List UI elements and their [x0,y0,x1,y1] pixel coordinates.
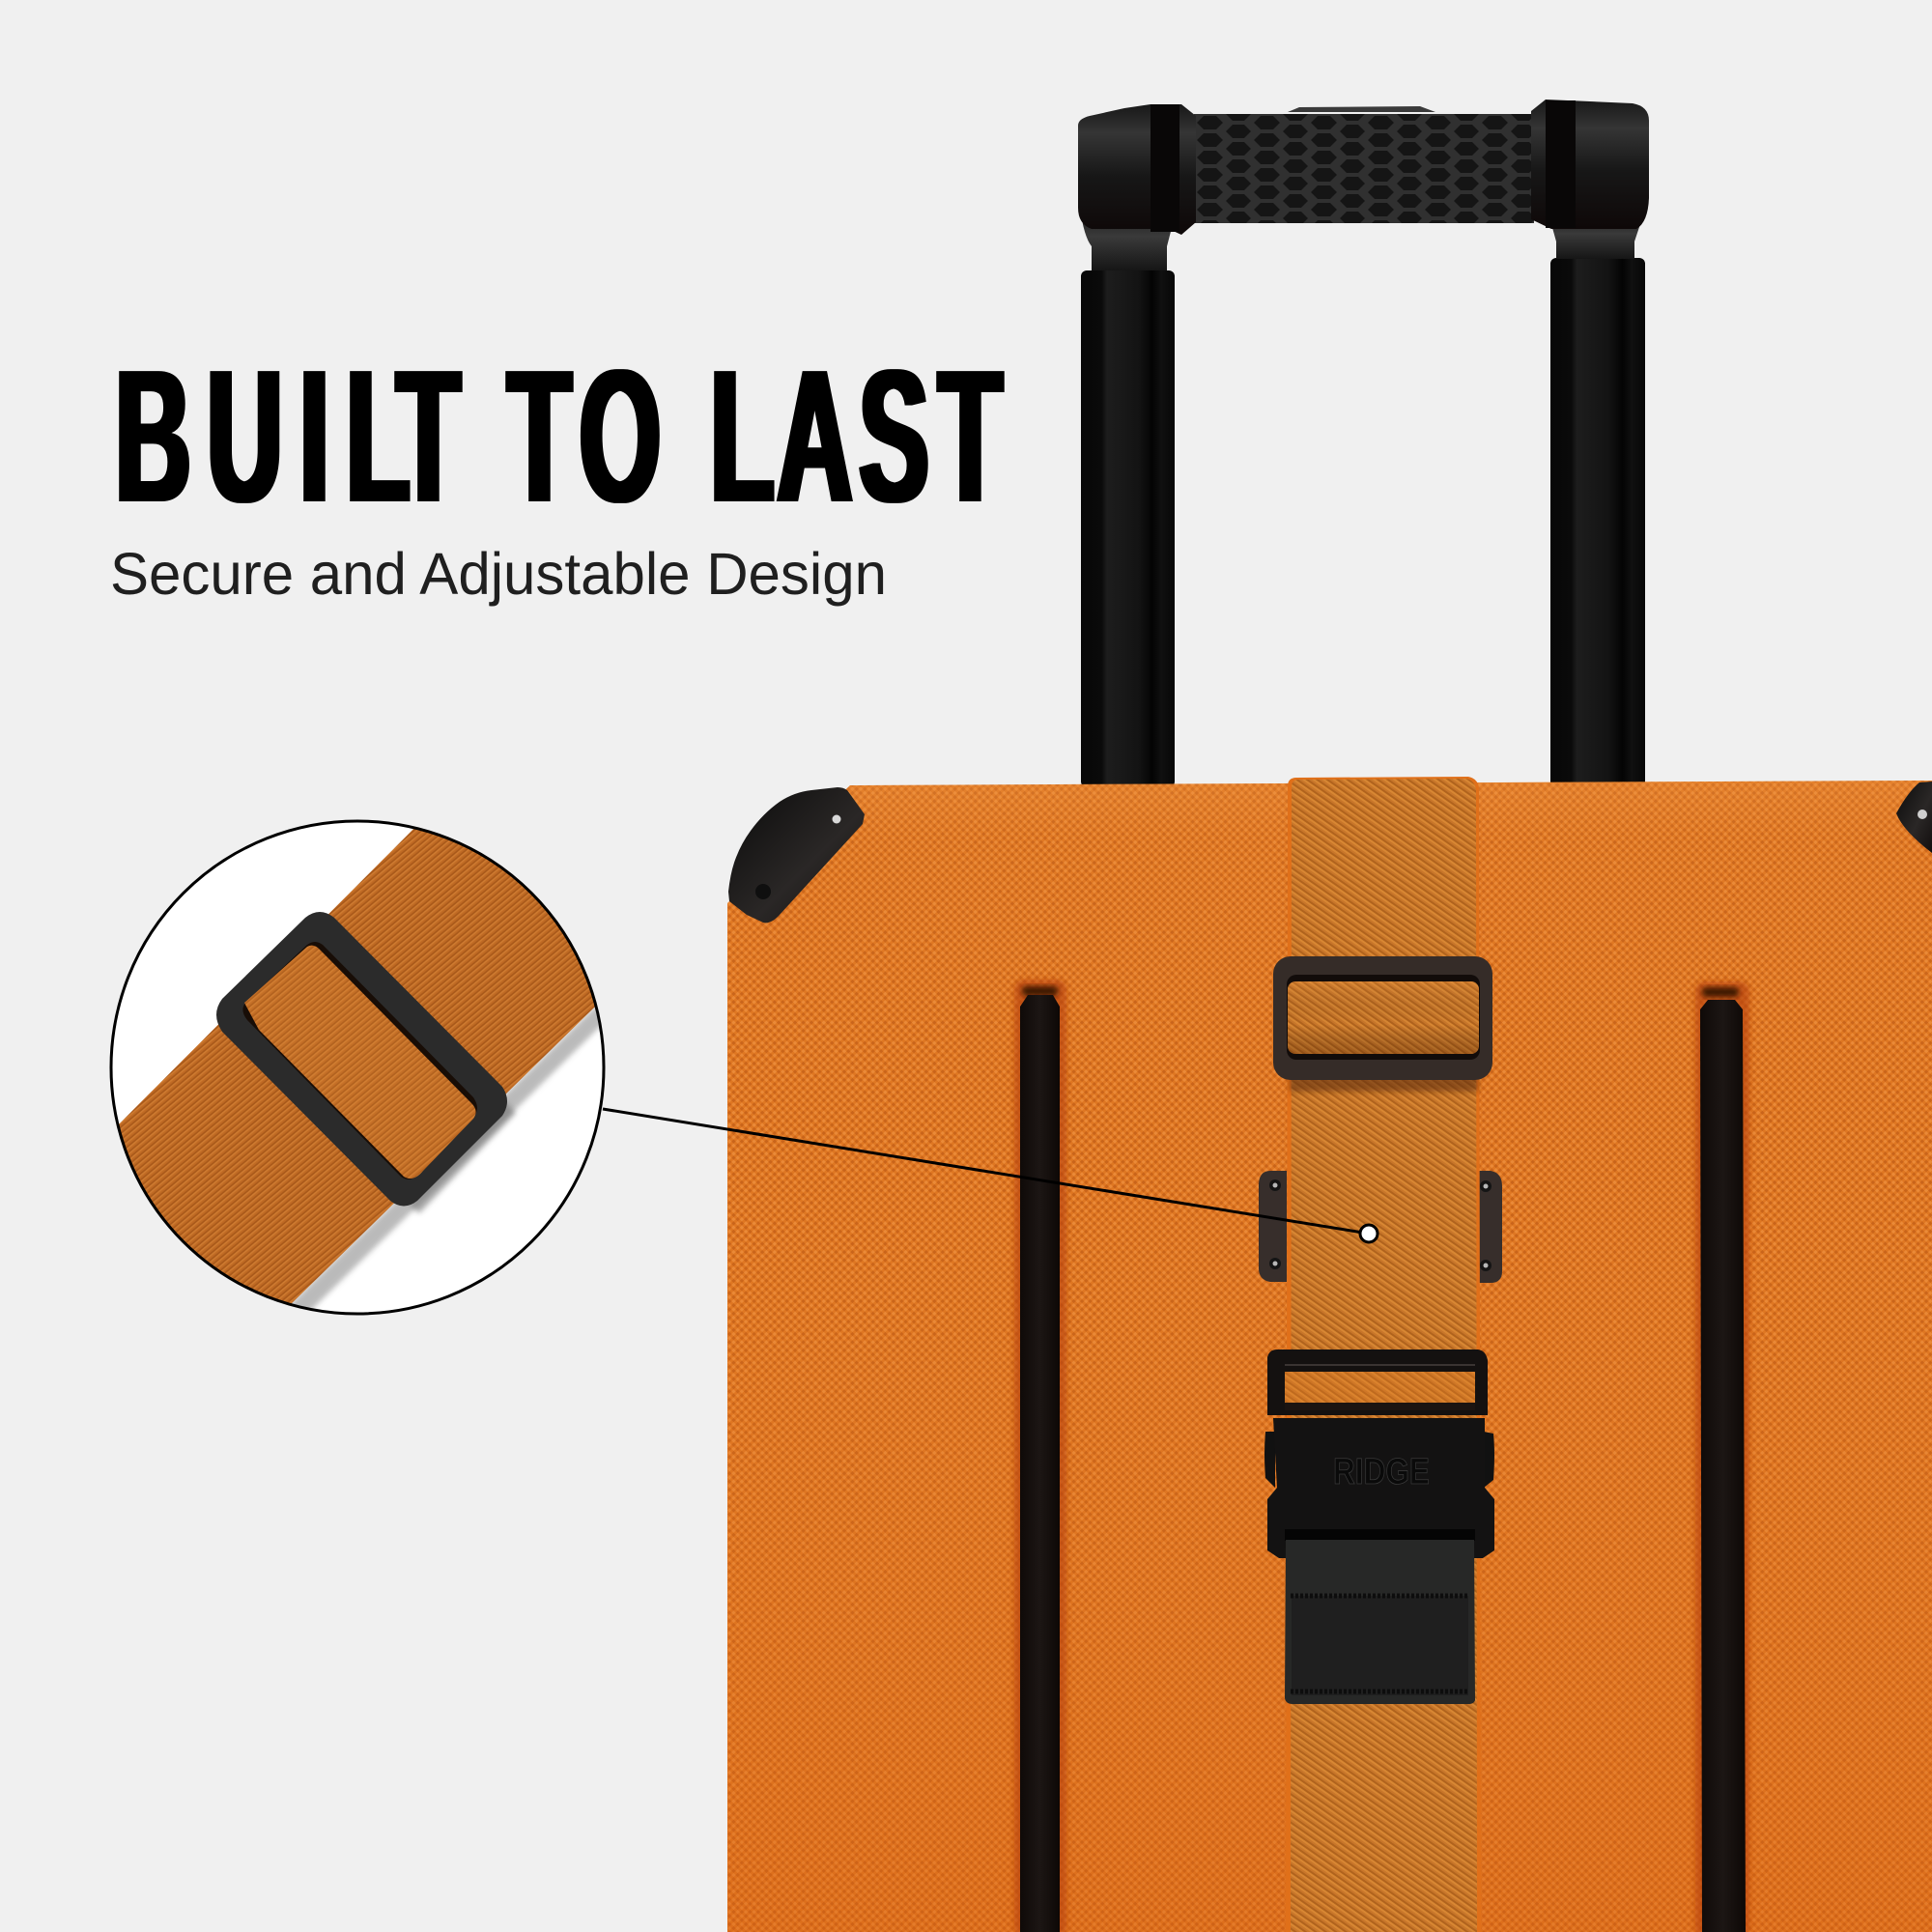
block collars [1151,104,1179,232]
diagonal strap [119,829,595,1304]
buckle inner window [242,942,477,1179]
left slot opening [1022,986,1058,996]
buckle shadow [410,1101,516,1213]
luggage strap [1286,777,1481,1932]
telescopic luggage handle [1078,99,1649,787]
black tab [1285,1540,1475,1704]
strap edge [1286,777,1481,1932]
upper slider buckle [1273,956,1492,1092]
shell shading [727,781,1932,1932]
callout dot [1360,1225,1378,1242]
left slot shadow [1014,980,1066,1932]
right handle block [1531,99,1649,229]
strap through buckle [244,946,476,1179]
orange shell [727,781,1932,1932]
embossed RIDGE logo: RIDGE [1333,1452,1430,1492]
strap loop [1288,981,1479,1054]
left handle block [1078,104,1196,235]
hexagon rubber grip [1194,114,1534,223]
left handle tube [1081,270,1175,787]
buckle body [1267,1418,1494,1558]
title: BUILT TO LAST [116,330,1002,542]
right slot shadow [1695,981,1749,1932]
left neck [1080,208,1173,270]
right handle tube [1550,258,1645,787]
buckle window [1287,975,1480,1060]
buckle shadow [1290,1074,1478,1092]
tab stitching [1291,1596,1469,1691]
webbing shadow gap [1285,1529,1475,1541]
slider window strap [1285,1372,1475,1406]
strap shadow [288,1007,609,1321]
subtitle: Secure and Adjustable Design [110,541,887,607]
circle outline [111,821,604,1314]
circle background [111,821,604,1314]
slider frame [1267,1350,1488,1415]
left plate [1259,1171,1287,1282]
right corner guard [1896,781,1932,853]
right neck [1549,213,1644,259]
right plate [1476,1171,1502,1283]
buckle side tabs [1264,1432,1494,1488]
lower buckle [1264,1350,1494,1704]
slider buckle frame [216,912,507,1206]
right slot opening [1702,987,1739,997]
left rail [1020,995,1060,1932]
handle button [1288,106,1435,112]
tab lower panel [1292,1596,1468,1695]
callout circle detail [110,819,605,1316]
mounting plates [1259,1171,1502,1283]
buckle frame [1273,956,1492,1080]
strap webbing [1291,779,1477,1932]
left corner guard [728,787,865,923]
right rail [1700,1000,1746,1932]
suitcase body [727,781,1932,1932]
callout leader line [603,1109,1369,1234]
